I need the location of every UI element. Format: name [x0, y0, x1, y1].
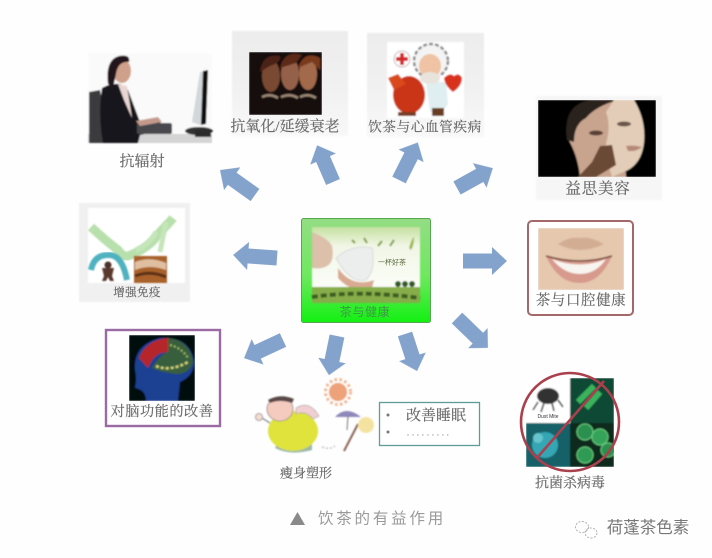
watermark text: 荷蓬茶色素 — [607, 518, 689, 537]
icon: brown food square — [134, 256, 167, 283]
small caption in image: 一杯好茶 — [378, 258, 406, 266]
arrow: to oral health — [463, 247, 507, 275]
arrow: to sleep — [392, 330, 430, 375]
arrow: to brain function — [238, 327, 289, 371]
panel: antibacterial and antiviral — [521, 373, 619, 492]
image: three aging faces — [249, 52, 322, 115]
label: slimming and body shaping: 瘦身塑形 — [280, 466, 332, 480]
panel background — [367, 33, 484, 137]
label: enhanced immunity: 增强免疫 — [113, 285, 161, 299]
icon: teal arch with figure — [91, 255, 127, 281]
image: woman's face, two layers — [538, 100, 656, 177]
bullet 2 — [386, 430, 390, 434]
arrow: to anti-aging — [304, 140, 346, 188]
box border — [528, 221, 633, 315]
arrow: to beauty — [450, 156, 500, 200]
arrow: to cardiovascular — [386, 136, 430, 186]
label: tea and health: 茶与健康 — [340, 304, 390, 319]
icon: umbrella — [335, 411, 374, 451]
green card — [302, 218, 430, 322]
panel: tea and cardiovascular disease — [367, 33, 484, 137]
image: brain scan head — [129, 335, 195, 401]
panel: enhanced immunity — [79, 203, 190, 302]
panel: antioxidant and anti-aging — [230, 31, 348, 136]
label: tea and cardiovascular disease: 饮茶与心血管疾病 — [368, 120, 482, 134]
list item: improve sleep: 改善睡眠 — [406, 407, 466, 424]
image: person smelling tea cup — [312, 227, 420, 303]
label: antioxidant and anti-aging: 抗氧化/延缓衰老 — [230, 117, 340, 135]
image: woman working at a computer — [88, 53, 213, 143]
arrow: to antibacterial — [447, 308, 498, 358]
caption text: 饮茶的有益作用 — [318, 510, 446, 528]
image: cartoon doctor with heart — [387, 42, 464, 118]
label: improved brain function: 对脑功能的改善 — [111, 403, 213, 420]
caption: dust mite: Dust Mite — [537, 414, 559, 420]
icon: triangle marker — [290, 512, 305, 525]
panel: slimming and body shaping — [256, 380, 374, 480]
box border — [106, 330, 220, 426]
bullet 1 — [386, 414, 390, 416]
panel background — [536, 96, 662, 200]
label: tea and oral health: 茶与口腔健康 — [536, 291, 626, 309]
label: anti-radiation: 抗辐射 — [119, 153, 165, 170]
panel background — [79, 203, 190, 302]
panel background — [232, 31, 348, 136]
arrow: to anti-radiation — [212, 159, 263, 206]
panel: central tea and health — [302, 218, 430, 322]
image: green branches, teal arch and food — [88, 208, 185, 283]
image: smiling mouth — [538, 228, 624, 290]
icon: chat bubbles outline — [576, 522, 597, 538]
arrow: to slimming — [315, 333, 351, 378]
box border — [380, 402, 480, 446]
panel: tea and oral health — [528, 221, 633, 315]
arrow: to immunity — [232, 241, 278, 272]
icon: sun — [326, 380, 350, 404]
panel: improved brain function — [106, 330, 220, 426]
caption — [290, 510, 446, 528]
panel: anti-radiation — [88, 53, 213, 170]
label: antibacterial and antiviral: 抗菌杀病毒 — [535, 474, 605, 492]
infographic: beneficial effects of tea — [79, 31, 688, 538]
panel: improved sleep list — [380, 402, 480, 446]
list item: dots: ......... — [407, 428, 451, 438]
label: beauty: 益思美容 — [565, 180, 631, 198]
icon: running overweight cartoon — [256, 396, 335, 453]
icon: green branches — [91, 218, 173, 256]
watermark — [576, 518, 689, 538]
panel: beauty — [538, 100, 656, 196]
prohibition sign — [521, 373, 619, 471]
